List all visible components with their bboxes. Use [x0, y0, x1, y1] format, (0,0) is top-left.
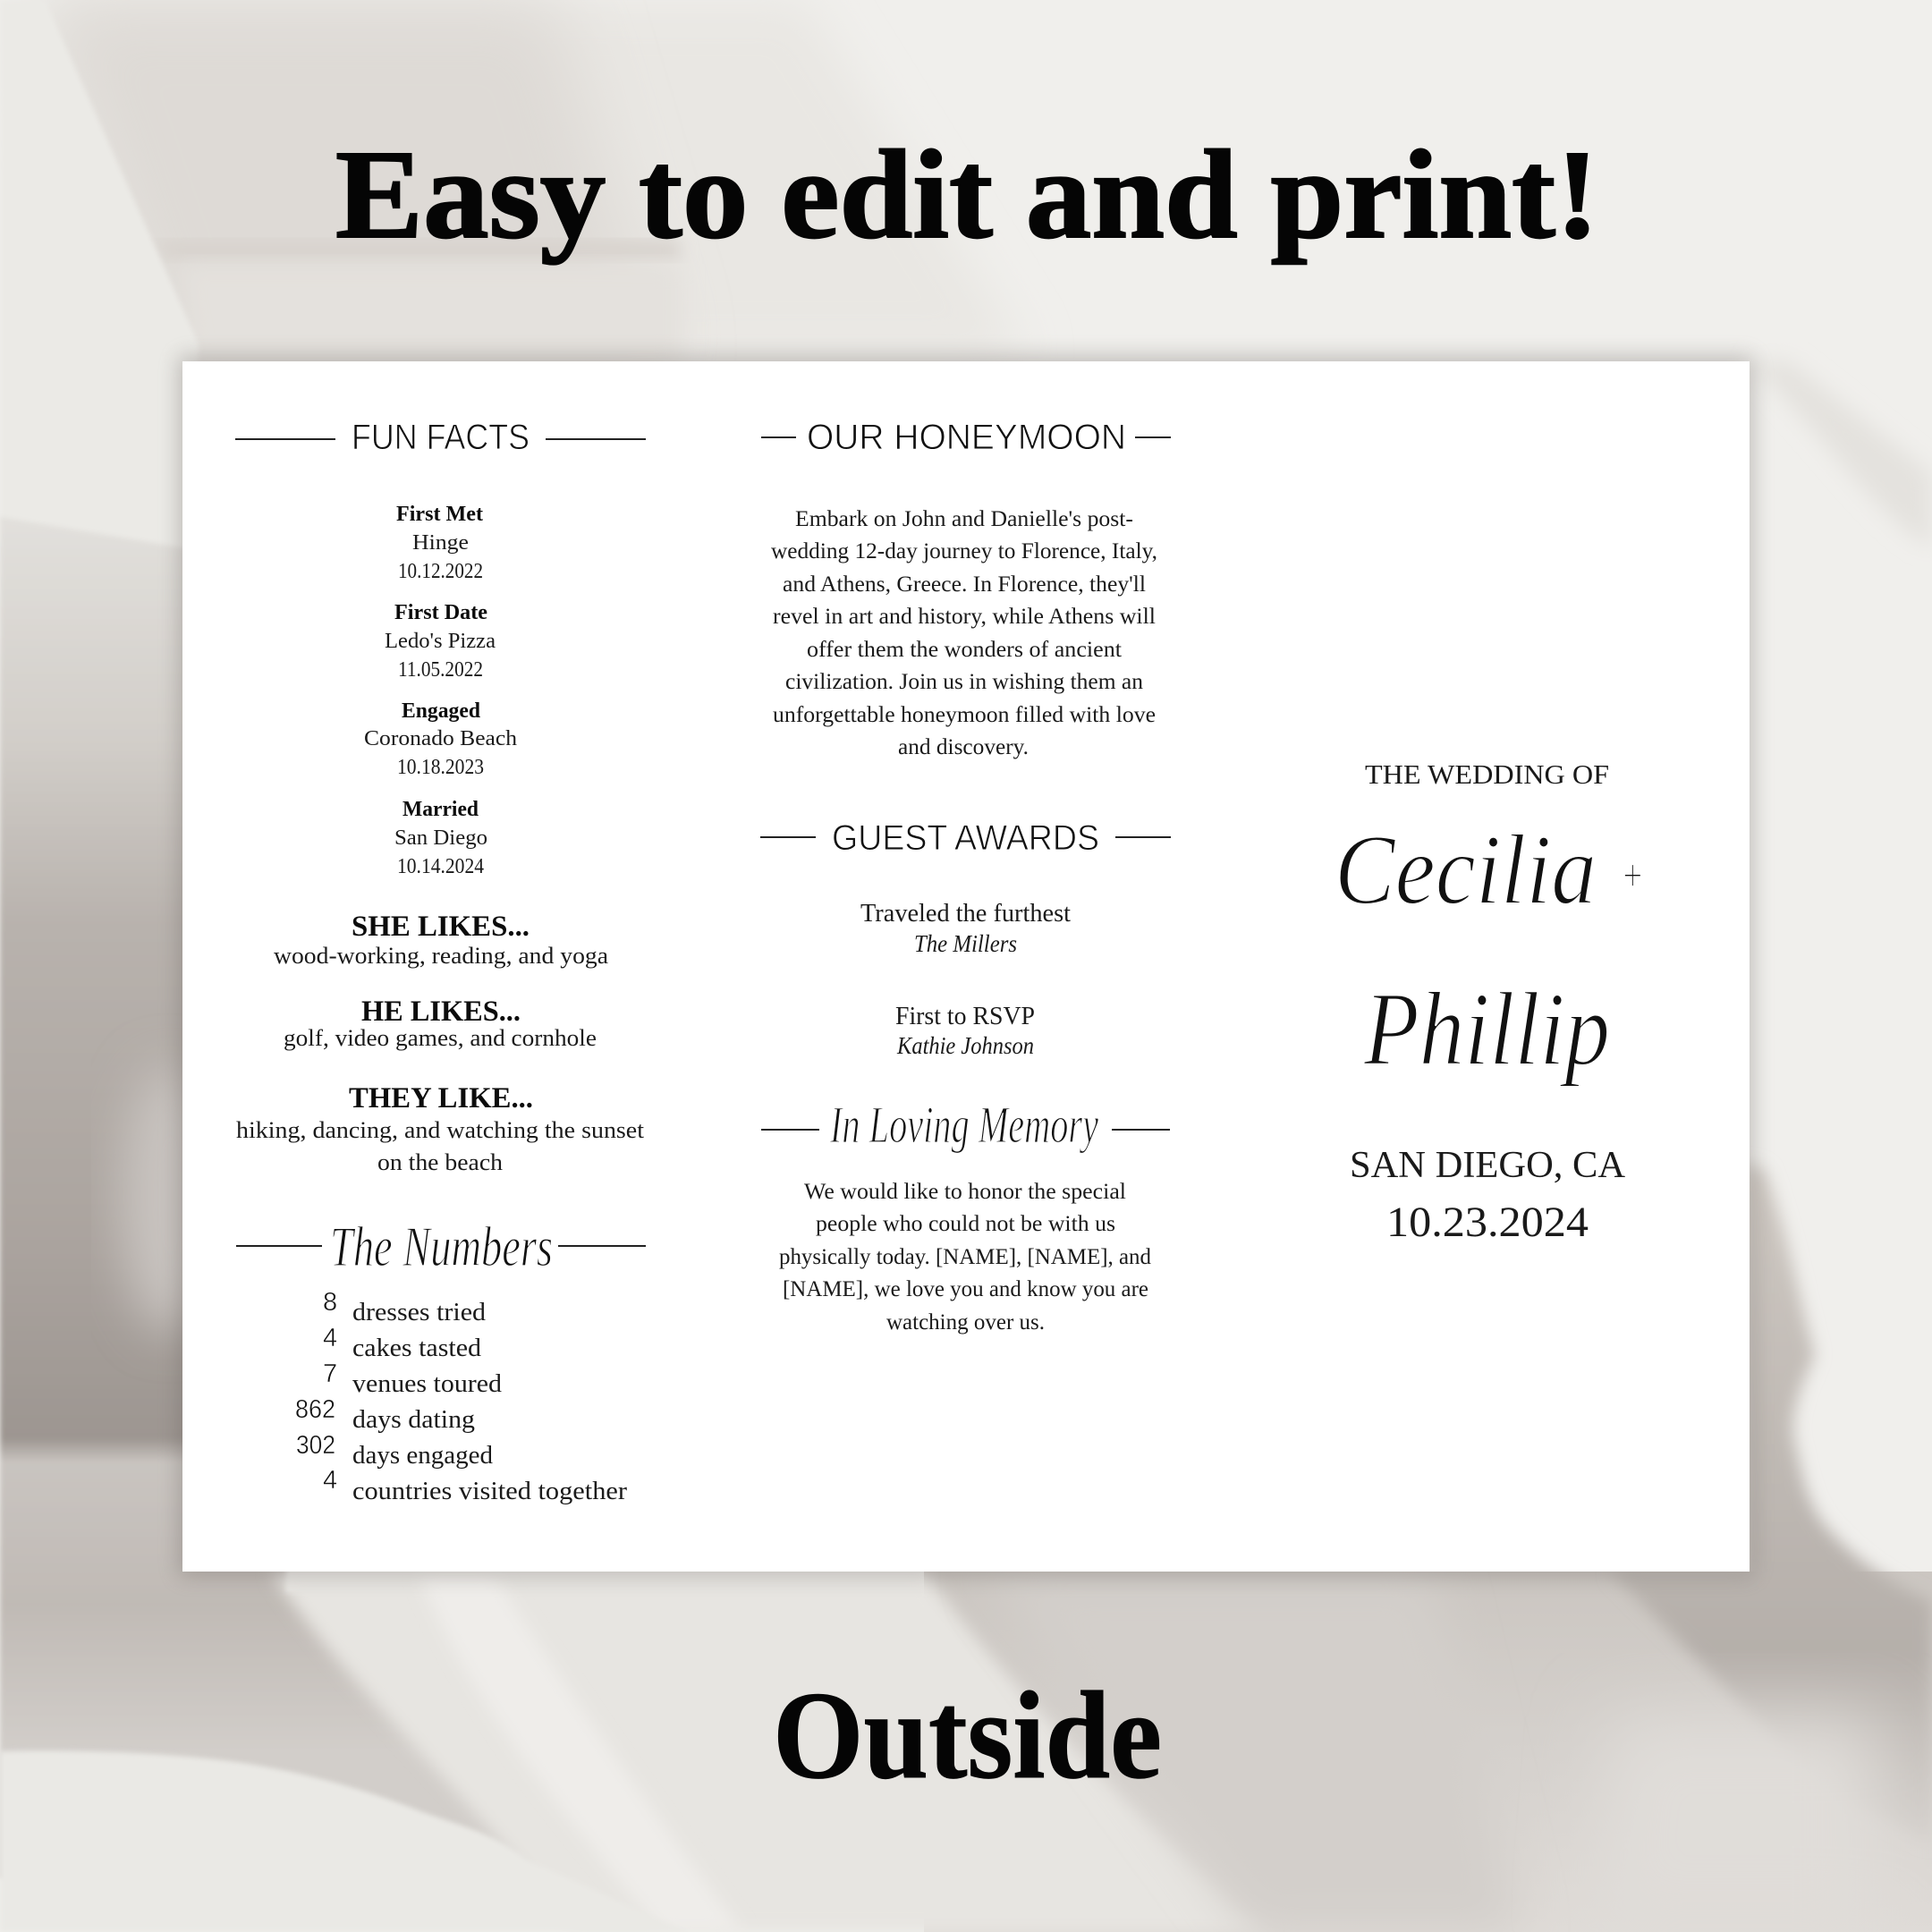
honeymoon paragraph: Embark on John and Danielle's post- [795, 507, 1133, 531]
numbers list: dresses tried [352, 1298, 487, 1326]
awards list: First to RSVP [895, 1003, 1035, 1030]
fact list [364, 503, 517, 878]
fact list: First Met [396, 503, 483, 526]
memorial paragraph: people who could not be with us [816, 1212, 1115, 1236]
fact list: First Date [394, 601, 487, 624]
honeymoon paragraph [771, 507, 1157, 759]
memorial paragraph [779, 1180, 1151, 1335]
location: SAN DIEGO, CA [1350, 1145, 1626, 1186]
heading: our honeymoon: OUR HONEYMOON [807, 418, 1126, 457]
memorial paragraph: physically today. [NAME], [NAME], and [779, 1245, 1151, 1269]
numbers list: 4 [323, 1466, 337, 1495]
numbers list: days dating [352, 1405, 475, 1434]
likes section: SHE LIKES... [352, 911, 530, 943]
panel: left column [235, 418, 646, 1505]
numbers list: countries visited together [352, 1477, 627, 1505]
numbers list: 862 [295, 1395, 335, 1424]
heading: guest awards: GUEST AWARDS [832, 818, 1099, 858]
likes section: wood-working, reading, and yoga [274, 943, 608, 969]
awards list: The Millers [914, 930, 1017, 957]
fact list: Ledo's Pizza [385, 630, 496, 653]
panel: cover column [1335, 758, 1644, 1246]
honeymoon paragraph: and discovery. [898, 735, 1029, 759]
couple names: Cecilia [1335, 815, 1597, 926]
cover eyebrow: THE WEDDING OF [1365, 758, 1609, 790]
numbers list: 4 [323, 1324, 337, 1352]
date: 10.23.2024 [1386, 1199, 1589, 1246]
fact list: Hinge [412, 531, 469, 555]
card shadow [179, 356, 1753, 1576]
numbers list: cakes tasted [352, 1334, 482, 1362]
likes section: THEY LIKE... [349, 1082, 533, 1114]
honeymoon paragraph: offer them the wonders of ancient [807, 638, 1122, 662]
likes section: golf, video games, and cornhole [284, 1025, 597, 1051]
heading: fun facts: FUN FACTS [352, 418, 530, 457]
fact list: 11.05.2022 [398, 658, 483, 682]
memorial paragraph: watching over us. [886, 1310, 1045, 1335]
likes section [236, 911, 645, 1175]
memorial paragraph: We would like to honor the special [804, 1180, 1126, 1204]
numbers list: 7 [323, 1360, 337, 1388]
footer label: Outside [773, 1666, 1162, 1805]
panel: middle column [760, 418, 1171, 1335]
numbers list: days engaged [352, 1441, 493, 1470]
couple names: + [1621, 851, 1644, 902]
couple names [1335, 815, 1644, 1088]
fact list: Coronado Beach [364, 727, 517, 750]
honeymoon paragraph: wedding 12-day journey to Florence, Italy, [771, 539, 1157, 564]
fact list: Engaged [402, 699, 481, 723]
likes section: on the beach [377, 1149, 503, 1175]
heading: in loving memory: In Loving Memory [829, 1096, 1098, 1154]
numbers list: venues toured [352, 1369, 503, 1398]
title: Easy to edit and print! [335, 123, 1599, 265]
numbers list [295, 1288, 627, 1505]
honeymoon paragraph: civilization. Join us in wishing them an [785, 670, 1144, 694]
fact list: San Diego [394, 826, 487, 850]
honeymoon paragraph: and Athens, Greece. In Florence, they'll [783, 572, 1146, 597]
numbers list: 8 [323, 1288, 337, 1317]
couple names: Phillip [1363, 970, 1610, 1088]
honeymoon paragraph: unforgettable honeymoon filled with love [773, 703, 1156, 727]
fact list: 10.18.2023 [397, 756, 484, 779]
fact list: 10.12.2022 [398, 560, 483, 583]
fact list: Married [402, 798, 479, 821]
likes section: HE LIKES... [361, 996, 521, 1028]
memorial paragraph: [NAME], we love you and know you are [783, 1277, 1148, 1301]
awards list: Kathie Johnson [896, 1032, 1034, 1059]
awards list [860, 900, 1071, 1059]
fact list: 10.14.2024 [397, 855, 484, 878]
panel: program card [182, 361, 1750, 1572]
awards list: Traveled the furthest [860, 900, 1071, 928]
likes section: hiking, dancing, and watching the sunset [236, 1117, 645, 1143]
heading: the numbers: The Numbers [330, 1215, 553, 1278]
numbers list: 302 [296, 1431, 335, 1460]
honeymoon paragraph: revel in art and history, while Athens will [773, 605, 1156, 629]
